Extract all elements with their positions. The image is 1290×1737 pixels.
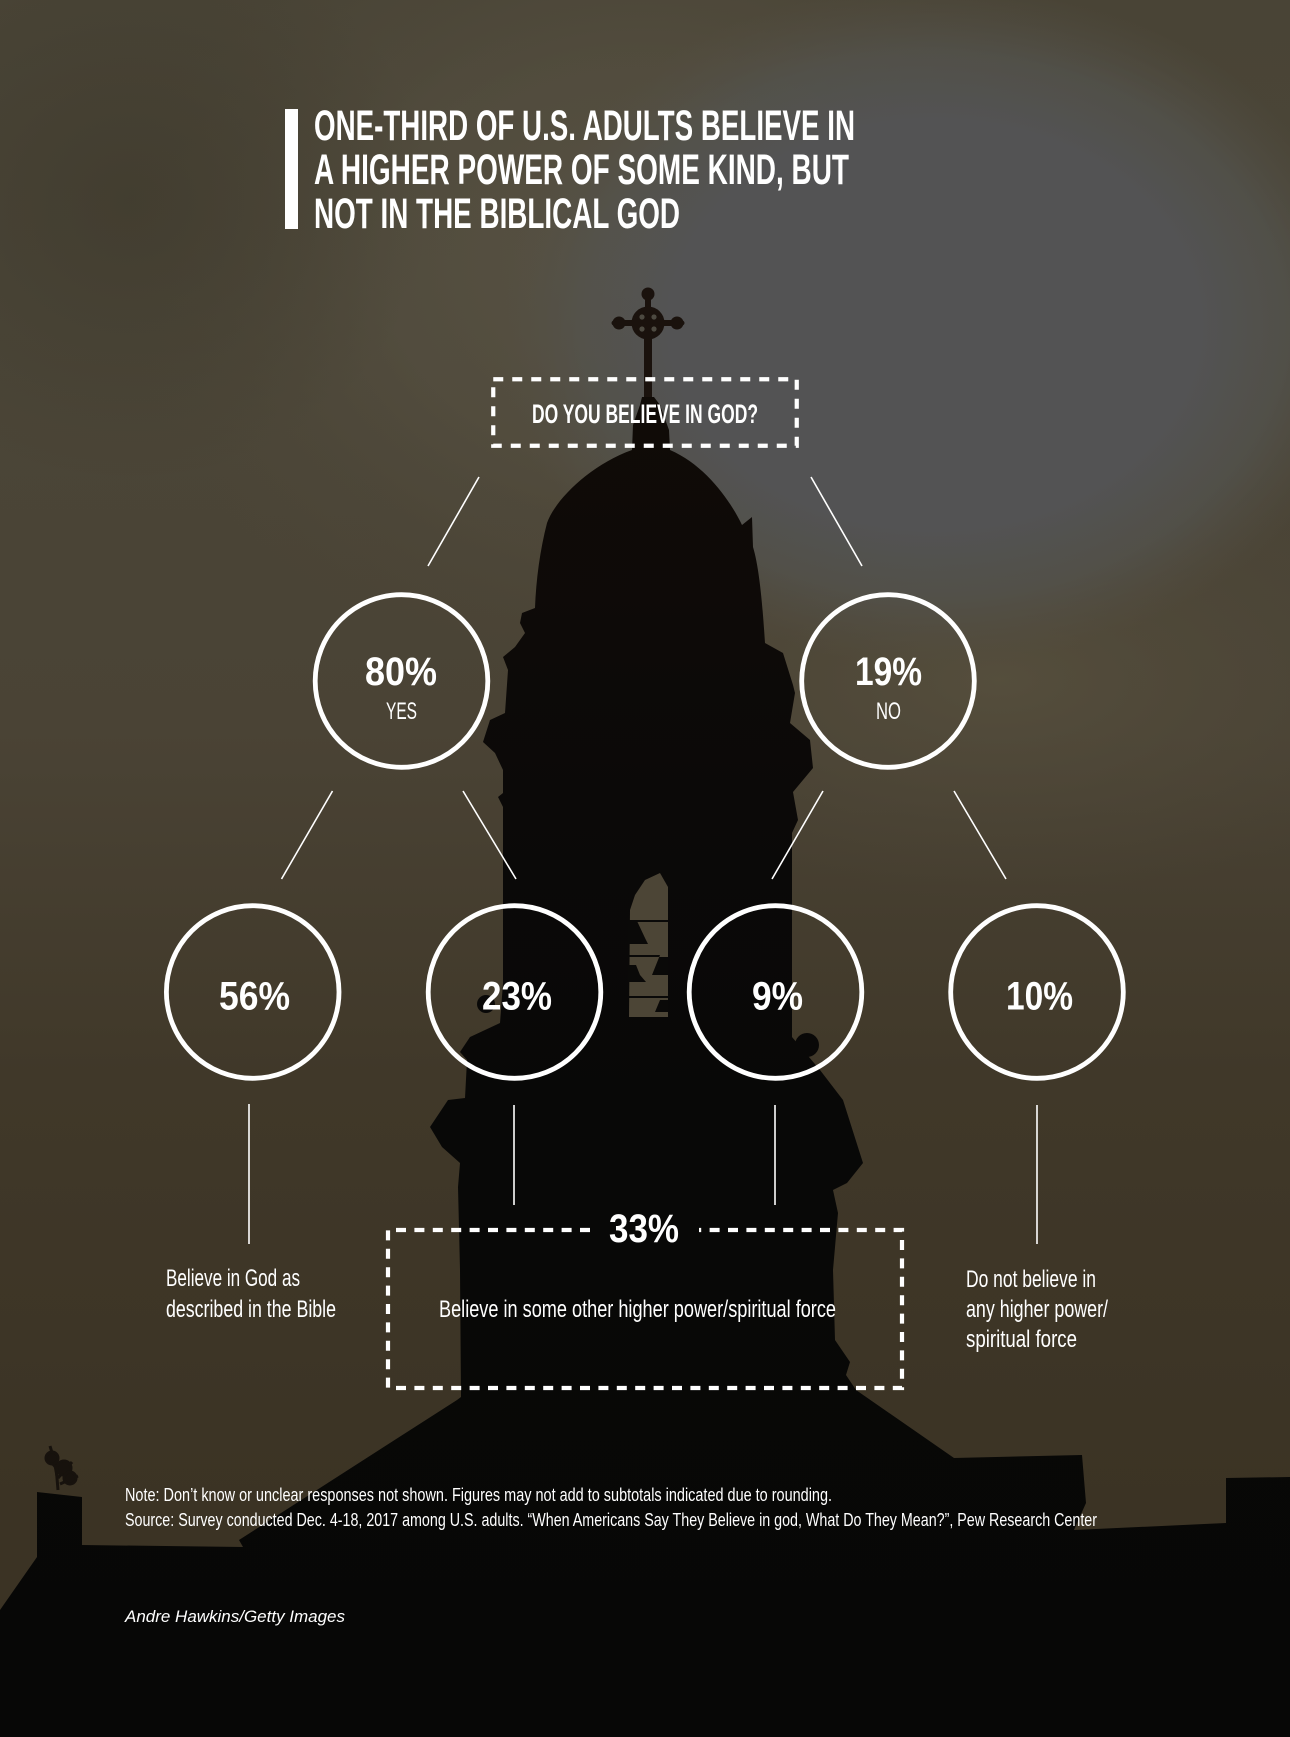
label: do not believe: Do not believe in <box>966 1266 1096 1293</box>
label: believe in God as described in the Bible: described in the Bible <box>166 1296 336 1323</box>
circle: 80% yes <box>315 595 488 767</box>
label: do not believe: any higher power/ <box>966 1296 1108 1323</box>
circle: 23%: 23% <box>482 974 552 1018</box>
title accent bar <box>285 109 298 229</box>
label: do not believe: spiritual force <box>966 1326 1077 1353</box>
circle: 56% <box>166 906 339 1078</box>
question box: DO YOU BELIEVE IN GOD? <box>532 399 758 429</box>
circle: 80% yes: 80% <box>365 650 437 694</box>
note and source: Note: Don’t know or unclear responses not shown. Figures may not add to subtotals indicated due to rounding. <box>125 1485 832 1505</box>
circle: 19% no: NO <box>876 698 901 725</box>
title text <box>314 102 855 238</box>
photo credit: Andre Hawkins/Getty Images <box>124 1607 345 1626</box>
callout box: 33% other higher power <box>388 1207 902 1388</box>
circle: 19% no: 19% <box>855 650 922 694</box>
circle: 80% yes: YES <box>386 698 417 725</box>
cross <box>612 288 684 400</box>
title text: NOT IN THE BIBLICAL GOD <box>314 190 680 238</box>
small tree on chimney <box>46 1446 78 1490</box>
title block <box>285 102 855 238</box>
title text: A HIGHER POWER OF SOME KIND, BUT <box>314 146 849 194</box>
circle: 19% no <box>802 595 974 767</box>
label: believe in God as described in the Bible <box>166 1265 336 1323</box>
title text: ONE-THIRD OF U.S. ADULTS BELIEVE IN <box>314 102 855 150</box>
question box <box>493 379 797 446</box>
connector lines <box>249 477 1037 1244</box>
callout box: 33% other higher power: Believe in some other higher power/spiritual force <box>439 1296 836 1323</box>
circle: 9%: 9% <box>752 974 803 1018</box>
circle: 10%: 10% <box>1006 974 1073 1018</box>
callout box: 33% other higher power: 33% <box>609 1207 679 1251</box>
circle: 10% <box>951 906 1123 1078</box>
circle: 23% <box>428 906 601 1078</box>
bell arch opening <box>629 873 668 1017</box>
note and source <box>125 1485 1097 1530</box>
circle: 9% <box>689 906 862 1078</box>
circle: 56%: 56% <box>219 974 290 1018</box>
label: do not believe <box>966 1266 1108 1353</box>
label: believe in God as described in the Bible: Believe in God as <box>166 1265 300 1292</box>
